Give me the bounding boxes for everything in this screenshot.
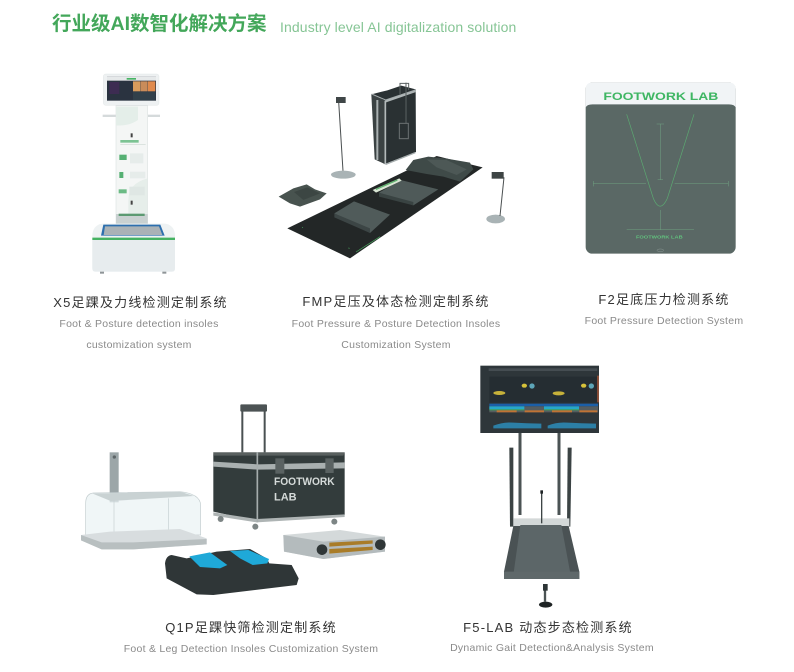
product: Q1P kit [81,404,386,595]
X5 english line one: Foot & Posture detection insoles [59,318,219,330]
product: F5-LAB treadmill [480,366,599,608]
product: FMP kit [279,83,505,258]
FMP english line one: Foot Pressure & Posture Detection Insoles [292,318,500,330]
Q1P english: Foot & Leg Detection Insoles Customization System [124,643,378,655]
FMP english line two: Customization System [341,339,451,351]
Q1P name: Q1P足踝快筛检测定制系统 [165,620,337,635]
plate logo: FOOTWORK LAB [603,91,718,103]
F5 english: Dynamic Gait Detection&Analysis System [450,642,654,654]
plate small logo: FOOTWORK LAB [636,235,683,241]
X5 name: X5足踝及力线检测定制系统 [53,295,228,310]
F2 name: F2足底压力检测系统 [598,292,730,307]
FMP name: FMP足压及体态检测定制系统 [302,294,490,309]
X5 english line two: customization system [86,339,192,351]
title: 行业级AI数智化解决方案 [52,13,267,35]
subtitle: Industry level AI digitalization solution [280,19,516,35]
F2 english: Foot Pressure Detection System [585,315,743,327]
product: X5 kiosk [92,74,175,274]
case logo: FOOTWORK [274,476,335,488]
F5 name: F5-LAB 动态步态检测系统 [463,620,633,635]
case logo line two: LAB [274,491,297,503]
product: F2 plate [586,83,736,254]
